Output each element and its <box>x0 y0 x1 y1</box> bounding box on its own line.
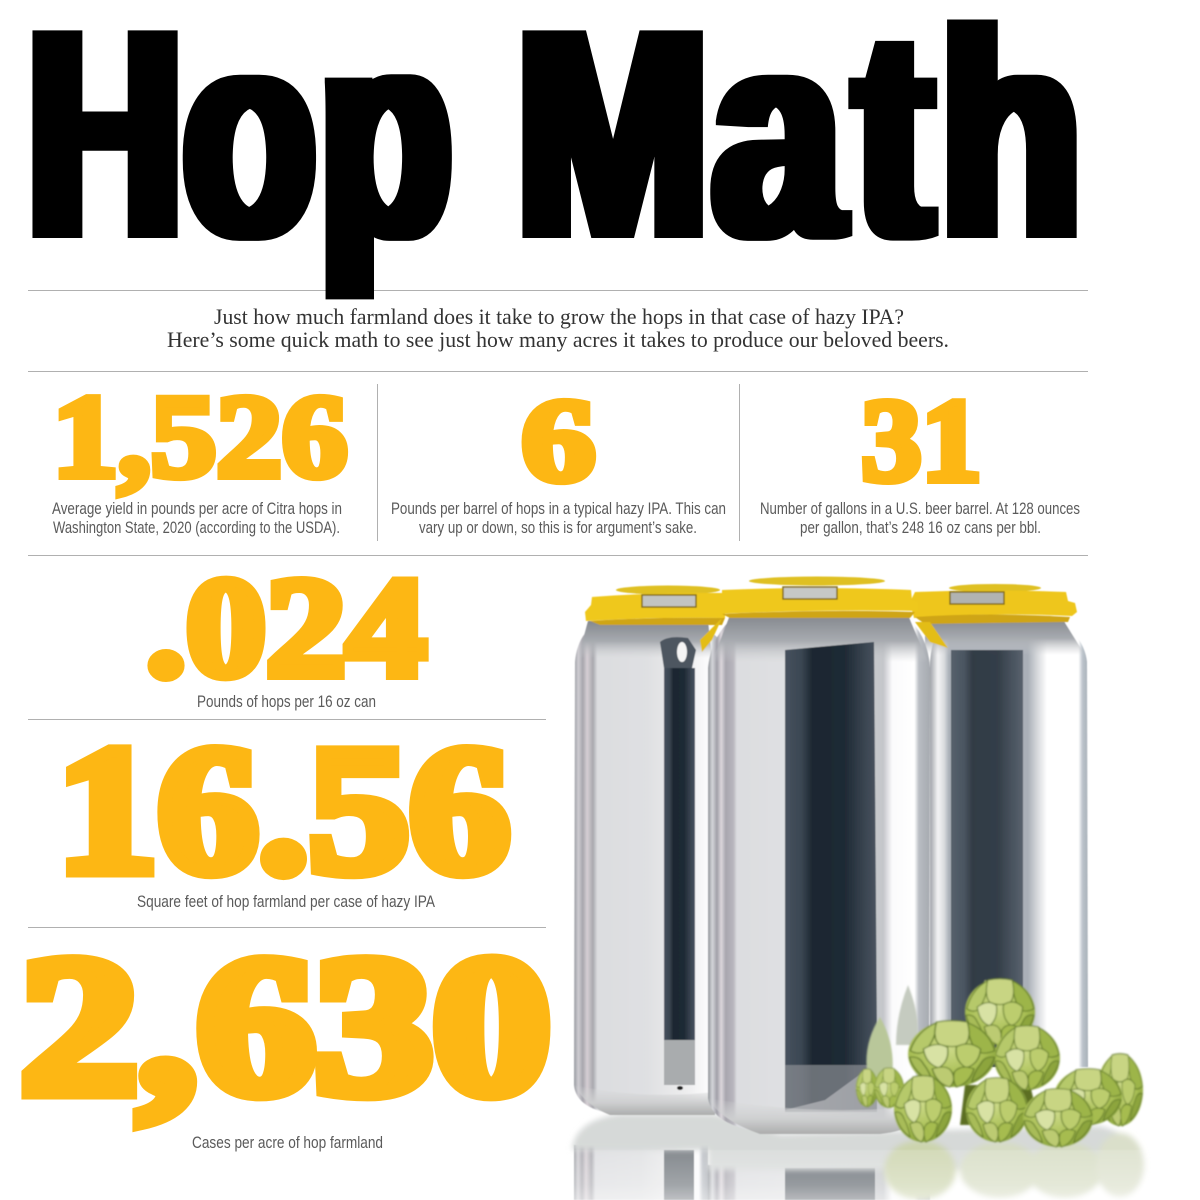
photo: can four-pack with hops <box>572 576 1147 1200</box>
stat: 6 <box>391 375 726 537</box>
stat: .024: Pounds of hops per 16 oz can <box>197 692 376 711</box>
stat: 6: Pounds per barrel of hops in a typical hazy IPA. This can <box>391 499 726 518</box>
rule: under intro <box>28 370 1088 372</box>
stat: 31: per gallon, that’s 248 16 oz cans per bbl. <box>800 518 1041 537</box>
intro text: Just how much farmland does it take to grow the hops in that case of hazy IPA? <box>214 304 904 329</box>
rule: under .024 <box>28 718 546 720</box>
rule: under title <box>28 290 1088 292</box>
stat: 1,526: Average yield in pounds per acre of Citra hops in <box>52 499 342 518</box>
stat: 31: Number of gallons in a U.S. beer barrel. At 128 ounces <box>760 499 1080 518</box>
stat: 16.56: Square feet of hop farmland per case of hazy IPA <box>137 892 436 911</box>
column divider 2 <box>738 384 740 541</box>
can: center <box>708 576 930 1134</box>
can: left <box>574 586 725 1115</box>
column divider 1 <box>376 384 378 541</box>
stat: 6: vary up or down, so this is for argument’s sake. <box>419 518 697 537</box>
can: right <box>910 584 1088 1067</box>
reflection on table <box>572 1114 1147 1200</box>
rule: under 16.56 <box>28 926 546 928</box>
stat: 31 <box>760 375 1080 537</box>
intro text: Here’s some quick math to see just how many acres it takes to produce our beloved beers. <box>167 327 949 352</box>
stat: 1,526: Washington State, 2020 (according to the USDA). <box>53 518 340 537</box>
stat: 2,630: Cases per acre of hop farmland <box>192 1133 383 1152</box>
stat: 16.56: 16.56 <box>57 710 510 911</box>
stat: 1,526: 1,526 <box>52 371 348 502</box>
intro text <box>167 304 949 352</box>
title <box>28 0 1081 301</box>
stat: 6: 6 <box>522 375 596 506</box>
hops cluster <box>856 979 1143 1147</box>
stat: 31: 31 <box>862 375 982 506</box>
stat: 2,630: 2,630 <box>20 916 550 1135</box>
stat: .024: .024 <box>146 548 426 706</box>
rule: under top stats <box>28 554 1088 556</box>
